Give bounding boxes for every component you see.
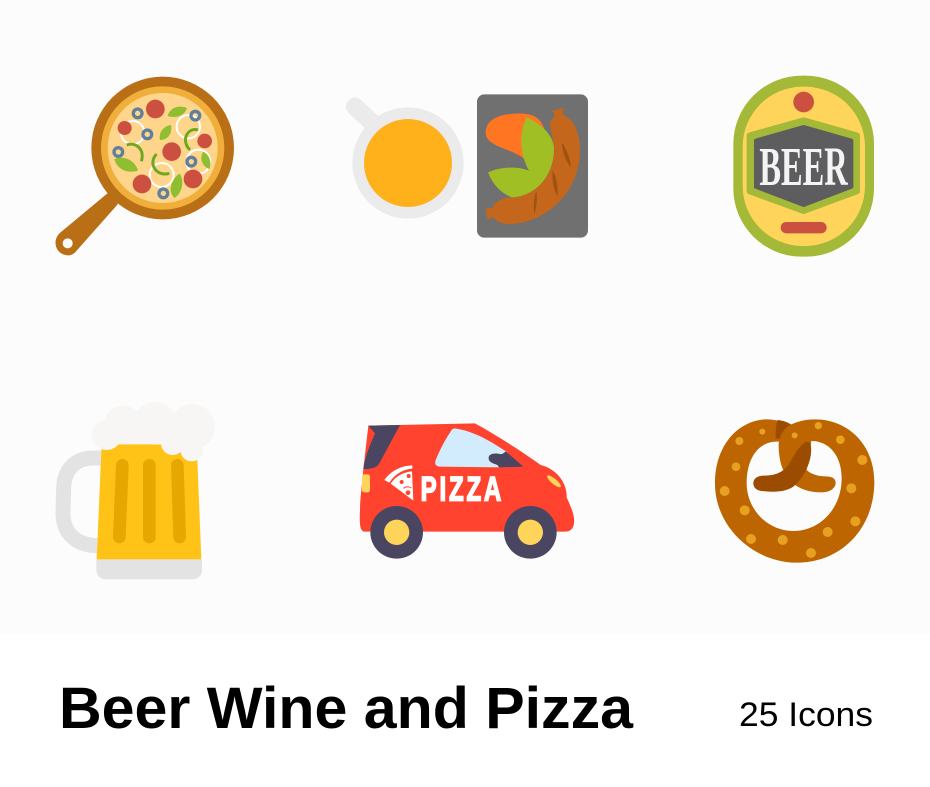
icon count: 25 Icons [739, 696, 873, 734]
icon: pizza delivery car [360, 423, 574, 559]
icon: beer badge [733, 76, 874, 257]
icon: cup of beer seen from above [352, 107, 464, 219]
icon: pizza in a pan [56, 77, 234, 255]
label: PIZZA: PIZZA [421, 471, 504, 509]
icon: sausage plate [477, 94, 588, 238]
pizza slice logo [384, 465, 413, 501]
icon: pretzel [715, 419, 874, 563]
title: Beer Wine and Pizza [59, 676, 634, 741]
label: BEER: BEER [759, 136, 848, 197]
icon: beer mug [63, 402, 215, 579]
